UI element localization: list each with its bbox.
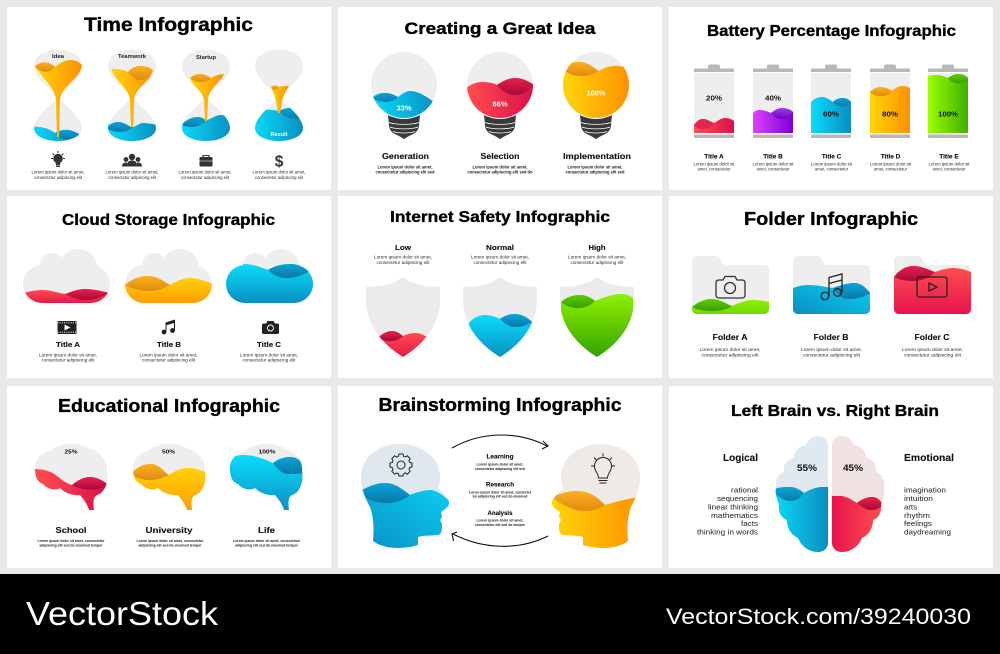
- percent labels: 50%: [162, 450, 175, 456]
- captions: Title D: [881, 154, 901, 160]
- captions: Lorem ipsum dolor sit amet, consectetur: [233, 539, 301, 543]
- captions: consectetur adipiscing elit: [702, 352, 759, 358]
- column: emotional: feelings: [904, 519, 932, 528]
- captions: Lorem ipsum dolor sit amet,: [32, 170, 84, 174]
- column: emotional: [904, 453, 954, 536]
- panel: folder: [669, 196, 993, 378]
- captions: Title A: [56, 340, 81, 349]
- captions: amet, consectetur: [756, 166, 790, 172]
- captions: Lorem ipsum dolor sit amet,: [106, 170, 158, 174]
- captions: amet, consectetur: [874, 166, 907, 172]
- captions: [38, 526, 301, 548]
- icon: camera: [262, 321, 279, 334]
- panel: time infographic: [7, 7, 331, 190]
- captions: Life: [258, 526, 276, 535]
- title: Educational Infographic: Educational Infographic: [58, 396, 280, 416]
- captions: Lorem ipsum dolor sit amet,: [801, 347, 862, 352]
- steps text: Research: [486, 482, 514, 488]
- icon: video outline: [917, 277, 947, 297]
- captions: consectetur adipiscing elit sed do: [468, 170, 533, 174]
- hourglass: Result: [255, 50, 303, 141]
- shield: high: [560, 277, 634, 360]
- column: emotional: rhythm: [904, 511, 930, 520]
- icon: gear: [390, 454, 412, 476]
- captions: Title C: [822, 154, 842, 160]
- captions: [32, 170, 306, 180]
- captions: Lorem ipsum dolor sit: [752, 162, 794, 166]
- captions: Lorem ipsum dolor sit amet,: [700, 347, 760, 352]
- cloud: title C: [225, 247, 315, 304]
- captions: Implementation: [563, 152, 631, 161]
- captions: [700, 333, 963, 358]
- panel: left vs right brain: [669, 386, 993, 568]
- steps text: tur adipiscing elit sed do eiusmod: [472, 494, 528, 498]
- captions: Lorem ipsum dolor sit amet,: [252, 170, 306, 174]
- captions: Low: [395, 243, 411, 252]
- title: Internet Safety Infographic: Internet Safety Infographic: [390, 209, 610, 226]
- column: emotional: intuition: [904, 494, 933, 503]
- column: emotional: imagination: [904, 486, 946, 494]
- column: emotional: Emotional: [904, 453, 954, 464]
- title: Left Brain vs. Right Brain: Left Brain vs. Right Brain: [731, 403, 939, 420]
- battery: 60%: 60%: [823, 112, 840, 118]
- captions: School: [56, 526, 86, 535]
- captions: Lorem ipsum dolor sit amet,: [378, 164, 432, 170]
- steps text: Lorem ipsum dolor sit amet,: [476, 518, 524, 522]
- icon: dollar: $: [275, 154, 284, 170]
- captions: consectetur adipiscing elit: [108, 175, 157, 180]
- captions: Lorem ipsum dolor sit amet,: [39, 352, 97, 358]
- shield: normal: [463, 277, 537, 360]
- column: logical: mathematics: [711, 511, 758, 520]
- battery: 80%: [870, 64, 910, 138]
- bulb: generation 33%: [370, 51, 438, 139]
- steps text: Lorem ipsum dolor sit amet,: [476, 462, 524, 466]
- captions: University: [146, 526, 193, 535]
- captions: consectetur adipiscing elit: [242, 358, 296, 362]
- battery: 20%: [693, 64, 735, 138]
- hourglass: Startup: [182, 50, 230, 141]
- folder: A camera: [692, 255, 769, 315]
- battery: 80%: 80%: [882, 112, 899, 118]
- captions: Lorem ipsum dolor sit: [870, 162, 912, 166]
- captions: amet, consectetur: [932, 166, 966, 172]
- icon: light bulb: [51, 151, 65, 167]
- brain: university 50%: [133, 444, 206, 510]
- title: Folder Infographic: Folder Infographic: [744, 209, 918, 229]
- captions: consectetur adipiscing elit: [255, 175, 304, 180]
- folder: C video: [894, 255, 971, 315]
- battery: 20%: 20%: [706, 96, 723, 102]
- captions: Title B: [157, 340, 182, 349]
- captions: consectetur adipiscing elit: [142, 358, 196, 362]
- captions: Selection: [480, 152, 520, 161]
- captions: Title C: [257, 340, 282, 349]
- captions: Folder B: [814, 333, 849, 342]
- icon: briefcase: [200, 156, 212, 166]
- icon: film: [58, 321, 76, 334]
- title: Battery Percentage Infographic: Battery Percentage Infographic: [707, 23, 956, 40]
- captions: Lorem ipsum dolor sit amet,: [568, 164, 622, 170]
- hourglass: Idea: Idea: [52, 54, 64, 60]
- captions: consectetur adipiscing elit sed: [376, 170, 435, 174]
- captions: Lorem ipsum dolor sit amet,: [902, 347, 963, 352]
- brain: school 25%: [34, 444, 108, 510]
- logo: VectorStock: VectorStock: [26, 595, 219, 632]
- captions: Lorem ipsum dolor sit: [928, 162, 970, 166]
- bulb: selection 66%: 66%: [493, 102, 508, 108]
- captions: Lorem ipsum dolor sit amet,: [374, 254, 432, 260]
- hourglass: Result: Result: [270, 132, 288, 138]
- captions: consectetur adipiscing elit: [570, 260, 624, 265]
- captions: Folder A: [712, 333, 748, 342]
- hourglass: Teamwork: [108, 50, 156, 141]
- bulb: implementation 100%: 100%: [586, 90, 606, 98]
- captions: Lorem ipsum dolor sit: [694, 162, 735, 166]
- hourglass: Startup: Startup: [196, 55, 216, 61]
- captions: Lorem ipsum dolor sit amet,: [240, 352, 298, 358]
- column: emotional: daydreaming: [904, 528, 951, 536]
- brain half: left 55%: 55%: [797, 463, 818, 474]
- bulb: generation 33%: 33%: [397, 106, 412, 112]
- captions: [694, 154, 970, 172]
- captions: [374, 243, 626, 265]
- captions: amet, consectetur: [815, 166, 848, 172]
- head: left blue: [361, 444, 449, 548]
- captions: Lorem ipsum dolor sit amet, consectetur: [136, 539, 204, 543]
- panel: brainstorming: [338, 386, 662, 568]
- brain: life 100%: [230, 444, 302, 510]
- head: right yellow: [552, 444, 640, 548]
- panel: creating a great idea: [338, 7, 662, 190]
- image url text: VectorStock.com/39240030: [666, 604, 971, 629]
- captions: adipiscing elit sed do eiusmod tempor: [138, 544, 202, 548]
- panel: battery percentage: [669, 7, 993, 190]
- percent labels: 25%: [64, 450, 78, 456]
- column: emotional: arts: [904, 502, 917, 512]
- icon: camera outline: [716, 276, 745, 298]
- column: logical: [697, 453, 758, 536]
- battery: 40%: [753, 64, 793, 138]
- captions: consectetur adipiscing elit: [376, 260, 430, 265]
- captions: adipiscing elit sed do eiusmod tempor: [235, 544, 299, 548]
- percent labels: 100%: [258, 450, 276, 456]
- icon: light bulb outline: [591, 454, 615, 483]
- title: Cloud Storage Infographic: Cloud Storage Infographic: [62, 212, 275, 229]
- bulb: selection 66%: [466, 51, 534, 139]
- column: logical: sequencing: [717, 494, 758, 503]
- steps text: Learning: [486, 454, 514, 460]
- captions: Normal: [486, 243, 514, 252]
- captions: adipiscing elit sed do eiusmod tempor: [40, 544, 103, 548]
- title: Time Infographic: Time Infographic: [84, 15, 253, 36]
- icon: music outline: [821, 274, 842, 300]
- arrow: top: [452, 435, 548, 449]
- captions: Generation: [382, 152, 429, 161]
- captions: Title E: [939, 154, 959, 160]
- captions: High: [588, 243, 606, 252]
- brain half: right 45%: [832, 436, 884, 552]
- captions: consectetur adipiscing elit: [181, 175, 230, 180]
- column: logical: linear thinking: [708, 502, 758, 512]
- captions: Lorem ipsum dolor sit amet,: [472, 164, 528, 170]
- column: logical: Logical: [723, 453, 758, 464]
- captions: Lorem ipsum dolor sit amet,: [568, 254, 626, 260]
- folder: B music: [793, 255, 870, 315]
- battery: 60%: [811, 64, 851, 138]
- panel: cloud storage: [7, 196, 331, 378]
- title: Brainstorming Infographic: Brainstorming Infographic: [378, 395, 622, 415]
- captions: Folder C: [914, 333, 950, 342]
- steps text: consectetur elit sed do tempor: [475, 523, 525, 527]
- captions: consectetur adipiscing elit: [34, 175, 83, 180]
- column: logical: thinking in words: [697, 528, 758, 536]
- captions: consectetur adipiscing elit: [474, 260, 527, 265]
- panel: educational: [7, 386, 331, 568]
- steps text: Analysis: [488, 510, 513, 517]
- icon: music note: [162, 320, 175, 334]
- column: logical: facts: [741, 519, 758, 528]
- captions: amet, consectetur: [698, 166, 731, 172]
- captions: Lorem ipsum dolor sit amet,: [471, 254, 529, 260]
- percent labels: [64, 450, 276, 456]
- hourglass: Idea: [32, 50, 82, 145]
- captions: consectetur adipiscing elit: [42, 358, 95, 362]
- captions: Lorem ipsum dolor sit amet,: [178, 170, 232, 174]
- bulb: implementation 100%: [560, 51, 632, 139]
- hourglass: Teamwork: Teamwork: [118, 54, 146, 60]
- panel: internet safety: [338, 196, 662, 378]
- brain half: right 45%: 45%: [843, 463, 864, 474]
- icon: team: [122, 154, 142, 166]
- battery: 40%: 40%: [765, 96, 782, 102]
- captions: Lorem ipsum dolor sit amet,: [140, 352, 198, 358]
- footer: black watermark bar: [0, 574, 1000, 654]
- cloud: title B: [124, 247, 214, 304]
- cloud: title A: [22, 247, 112, 304]
- shield: low: [366, 277, 440, 360]
- steps text: Lorem ipsum dolor sit amet, consectet: [469, 490, 532, 494]
- brain half: left 55%: [776, 436, 828, 552]
- captions: [39, 340, 298, 362]
- captions: [376, 152, 631, 174]
- captions: consectetur adipiscing elit: [904, 352, 962, 358]
- captions: consectetur adipiscing elit: [803, 352, 861, 358]
- battery: 100%: 100%: [938, 112, 959, 118]
- captions: Lorem ipsum dolor sit: [811, 162, 853, 166]
- steps text: [469, 454, 532, 527]
- captions: Title B: [763, 154, 783, 160]
- column: logical: rational: [731, 486, 758, 494]
- steps text: consectetur adipiscing elit sed: [475, 467, 526, 471]
- battery: 100%: [928, 64, 968, 138]
- captions: Title A: [704, 154, 724, 160]
- captions: consectetur adipiscing elit sed: [566, 170, 625, 174]
- captions: Lorem ipsum dolor sit amet, consectetur: [38, 539, 105, 543]
- arrow: bottom: [452, 532, 548, 546]
- title: Creating a Great Idea: Creating a Great Idea: [404, 19, 596, 38]
